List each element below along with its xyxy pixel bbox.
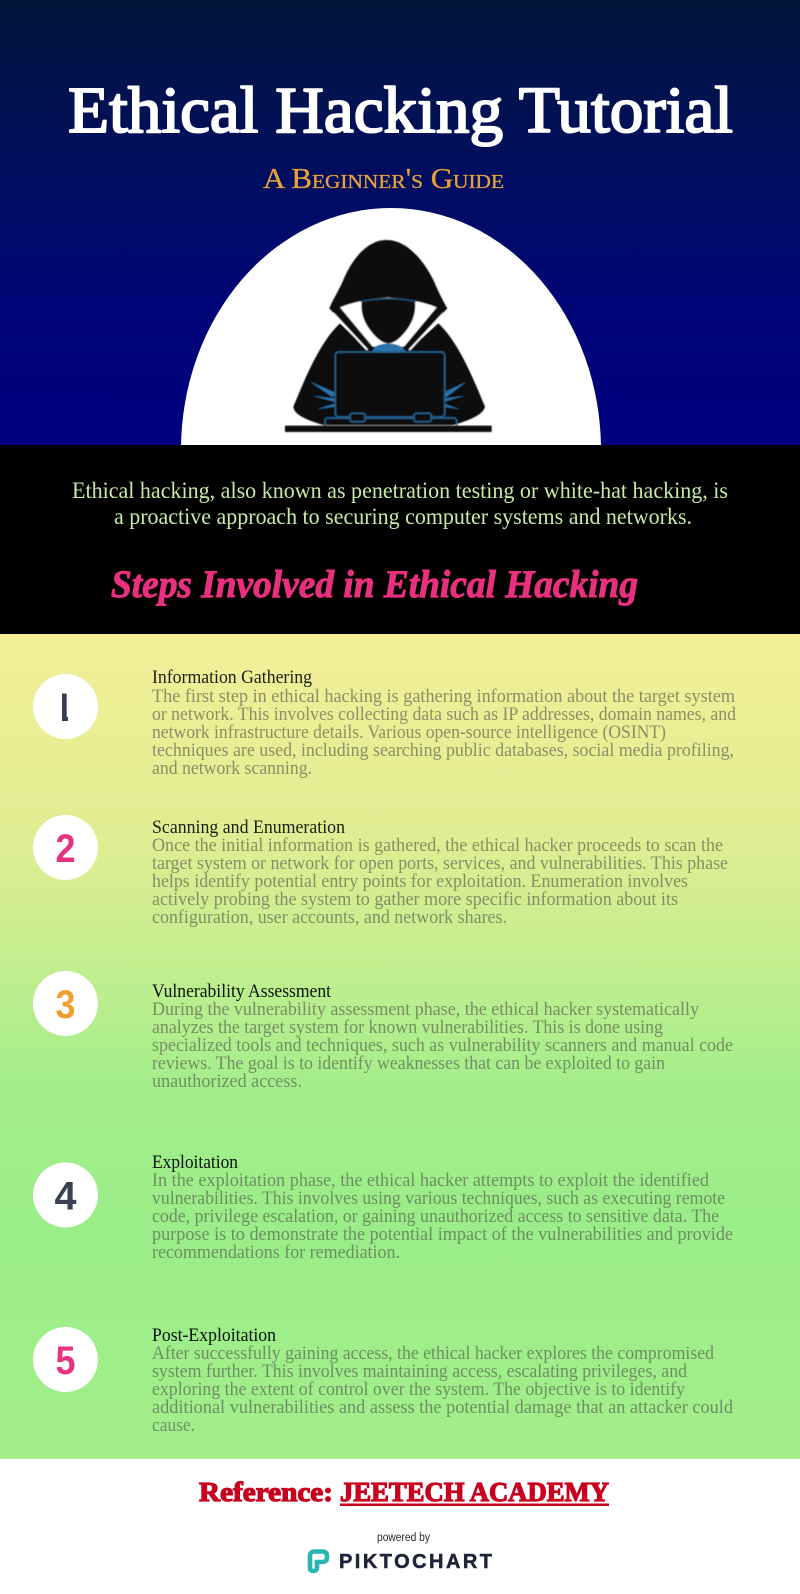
step 2 body: actively probing the system to gather more specific information about its	[152, 889, 678, 910]
step 4	[33, 1152, 733, 1263]
step 2 body: configuration, user accounts, and network shares.	[152, 907, 507, 928]
panel: footer	[0, 1459, 800, 1594]
number badge 2	[33, 815, 98, 880]
step 5	[33, 1325, 733, 1436]
step 1 body: The first step in ethical hacking is gathering information about the target system	[152, 686, 735, 707]
section heading: Steps Involved in Ethical Hacking	[111, 563, 638, 606]
step 1 heading: Information Gathering	[152, 667, 312, 688]
step 3 body: analyzes the target system for known vulnerabilities. This is done using	[152, 1017, 663, 1038]
powered by label: powered by	[377, 1532, 430, 1544]
icon: hooded hacker at laptop	[285, 240, 492, 432]
step 1 body: techniques are used, including searching public databases, social media profiling,	[152, 740, 734, 761]
number badge 3	[33, 971, 98, 1036]
intro text: a proactive approach to securing computer systems and networks.	[114, 504, 692, 529]
step 2 body: target system or network for open ports, services, and vulnerabilities. This phase	[152, 853, 728, 874]
step 2 body: helps identify potential entry points for exploitation. Enumeration involves	[152, 871, 688, 892]
step 3 body	[152, 999, 733, 1092]
step 1 body	[152, 686, 736, 779]
step 5 body: system further. This involves maintaining access, escalating privileges, and	[152, 1361, 687, 1382]
Piktochart wordmark: PIKTOCHART	[339, 1551, 492, 1573]
intro text: Ethical hacking, also known as penetration testing or white-hat hacking, is	[72, 478, 728, 503]
reference line	[199, 1477, 609, 1507]
step 5 body	[152, 1343, 733, 1436]
number badge 4: 4	[54, 1174, 77, 1218]
step 1 body: or network. This involves collecting data such as IP addresses, domain names, and	[152, 704, 736, 725]
step 4 body: In the exploitation phase, the ethical hacker attempts to exploit the identified	[152, 1170, 709, 1191]
step 3 body: unauthorized access.	[152, 1071, 302, 1092]
step 2	[33, 815, 728, 928]
number badge 1	[33, 674, 98, 739]
step 5 heading: Post-Exploitation	[152, 1325, 276, 1346]
step 1 body: and network scanning.	[152, 758, 312, 779]
title: Ethical Hacking Tutorial	[68, 74, 733, 147]
white circle behind hacker	[181, 208, 601, 445]
step 5 body: exploring the extent of control over the system. The objective is to identify	[152, 1379, 685, 1400]
step 4 body: code, privilege escalation, or gaining unauthorized access to sensitive data. The	[152, 1206, 719, 1227]
step 5 body: additional vulnerabilities and assess the potential damage that an attacker could	[152, 1397, 733, 1418]
number badge 4	[33, 1162, 98, 1228]
step 4 body: recommendations for remediation.	[152, 1242, 400, 1263]
reference line: JEETECH ACADEMY	[340, 1477, 609, 1507]
step 3 heading: Vulnerability Assessment	[152, 981, 332, 1002]
step 3	[33, 971, 733, 1092]
panel: steps background	[0, 634, 800, 1459]
step 2 heading: Scanning and Enumeration	[152, 817, 345, 838]
number badge 5: 5	[56, 1339, 76, 1383]
number badge 1: 1	[52, 686, 74, 730]
step 2 body	[152, 835, 728, 928]
number badge 2: 2	[56, 827, 76, 871]
step 3 body: specialized tools and techniques, such as vulnerability scanners and manual code	[152, 1035, 733, 1056]
subtitle: A Beginner's Guide	[263, 163, 504, 195]
icon: Piktochart logo	[310, 1552, 327, 1571]
step 4 body: purpose is to demonstrate the potential impact of the vulnerabilities and provide	[152, 1224, 733, 1245]
reference line: Reference:	[199, 1477, 333, 1507]
number badge 5	[33, 1327, 98, 1392]
intro text	[72, 478, 728, 529]
step 4 heading: Exploitation	[152, 1152, 238, 1173]
step 5 body: After successfully gaining access, the ethical hacker explores the compromised	[152, 1343, 714, 1364]
step 2 body: Once the initial information is gathered, the ethical hacker proceeds to scan the	[152, 835, 723, 856]
step 3 body: reviews. The goal is to identify weaknesses that can be exploited to gain	[152, 1053, 665, 1074]
step 1	[33, 667, 736, 779]
step 3 body: During the vulnerability assessment phase, the ethical hacker systematically	[152, 999, 699, 1020]
panel: black intro band	[0, 445, 800, 634]
step 4 body: vulnerabilities. This involves using various techniques, such as executing remote	[152, 1188, 725, 1209]
panel: header	[0, 0, 800, 445]
number badge 3: 3	[56, 983, 76, 1027]
step 4 body	[152, 1170, 733, 1263]
step 5 body: cause.	[152, 1415, 195, 1436]
step 1 body: network infrastructure details. Various open-source intelligence (OSINT)	[152, 722, 666, 743]
